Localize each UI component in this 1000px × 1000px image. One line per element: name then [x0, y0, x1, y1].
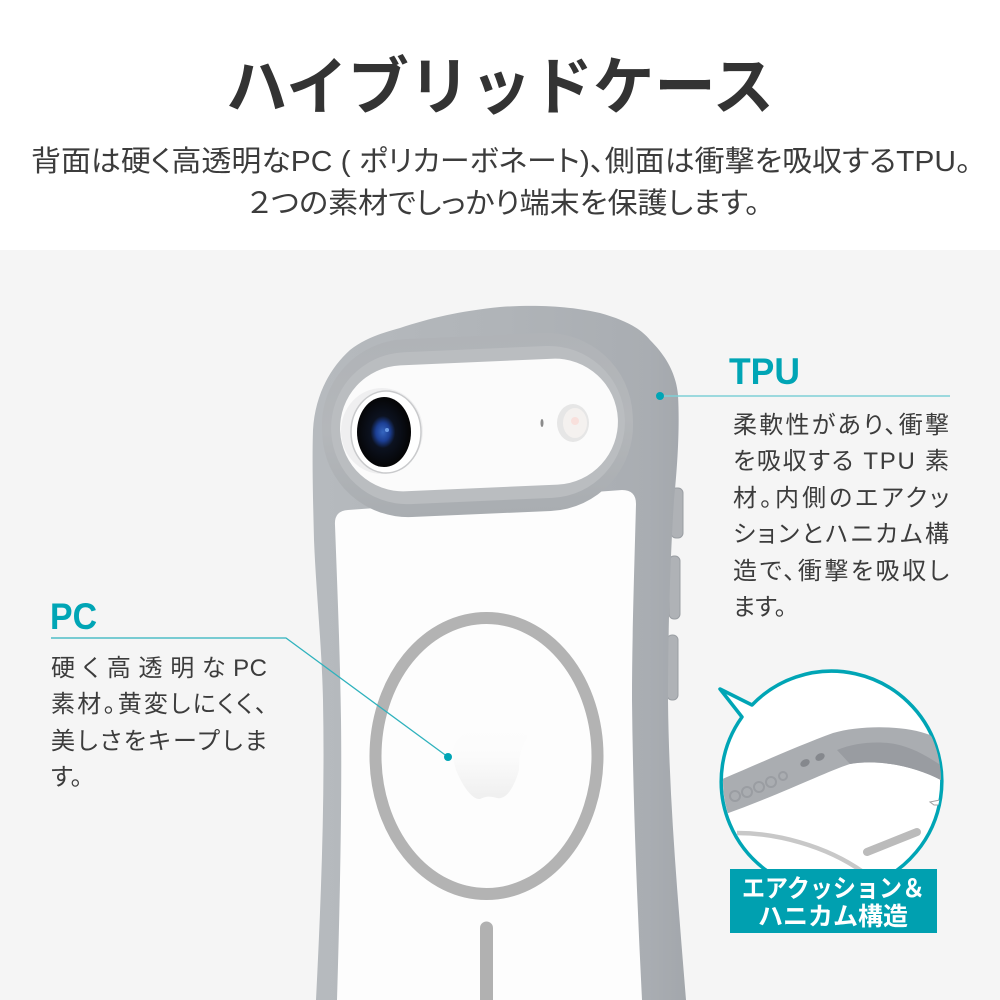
text: PC description: 硬 く 高 透 明 な PC — [51, 655, 267, 682]
enlarged ring arc — [737, 833, 863, 872]
text: PC description: す。 — [51, 764, 82, 791]
clear PC back panel — [335, 490, 642, 1000]
enlarged bar — [867, 832, 917, 852]
MagSafe alignment bar — [480, 922, 493, 1000]
bubble fill and tail — [720, 671, 942, 892]
text: TPU description — [733, 412, 949, 621]
heading: PC: PC — [50, 596, 97, 637]
text: TPU description: 柔軟性があり、衝撃 — [733, 412, 949, 439]
flash — [557, 404, 589, 442]
phone with hybrid case — [313, 306, 686, 1000]
text: TPU description: を吸収する TPU 素 — [733, 448, 949, 475]
TPU case outer frame — [313, 306, 686, 1000]
intro text: ２つの素材でしっかり端末を保護します。 — [248, 187, 760, 220]
honeycomb cells — [730, 772, 787, 801]
apple logo — [453, 729, 528, 799]
MagSafe ring — [376, 618, 598, 894]
text: PC description: 美しさをキープしま — [51, 728, 267, 755]
text: TPU description: 材。内側のエアクッ — [733, 485, 949, 512]
text: TPU description: ションとハニカム構 — [733, 521, 949, 548]
enlarged case interior — [720, 727, 948, 872]
callout line: TPU — [656, 392, 950, 400]
camera bump inner rim — [328, 343, 628, 507]
intro text: 背面は硬く高透明なPC ( ポリカーボネート)、側面は衝撃を吸収するTPU。 — [31, 145, 971, 178]
case buttons — [667, 488, 683, 700]
label: air cushion and honeycomb: ハニカム構造 — [758, 897, 908, 933]
intro text — [31, 145, 971, 220]
text: PC description — [51, 655, 267, 791]
camera opening — [337, 356, 621, 494]
air cushion slots — [800, 753, 825, 767]
text: TPU description: 造で、衝撃を吸収し — [733, 558, 949, 585]
title: ハイブリッドケース — [226, 37, 774, 128]
label: air cushion and honeycomb: エアクッション＆ — [742, 869, 925, 905]
label: air cushion and honeycomb — [730, 869, 937, 933]
text: PC description: 素材。黄変しにくく、 — [51, 691, 267, 718]
microphone — [540, 419, 544, 427]
heading: TPU: TPU — [729, 351, 800, 392]
background panel — [0, 250, 1000, 1000]
camera bump lip — [318, 329, 637, 521]
zoom detail bubble — [718, 669, 944, 869]
callout line: PC — [51, 638, 452, 761]
camera lens — [341, 388, 423, 474]
text: TPU description: ます。 — [733, 594, 786, 621]
small ring mark — [929, 800, 940, 806]
